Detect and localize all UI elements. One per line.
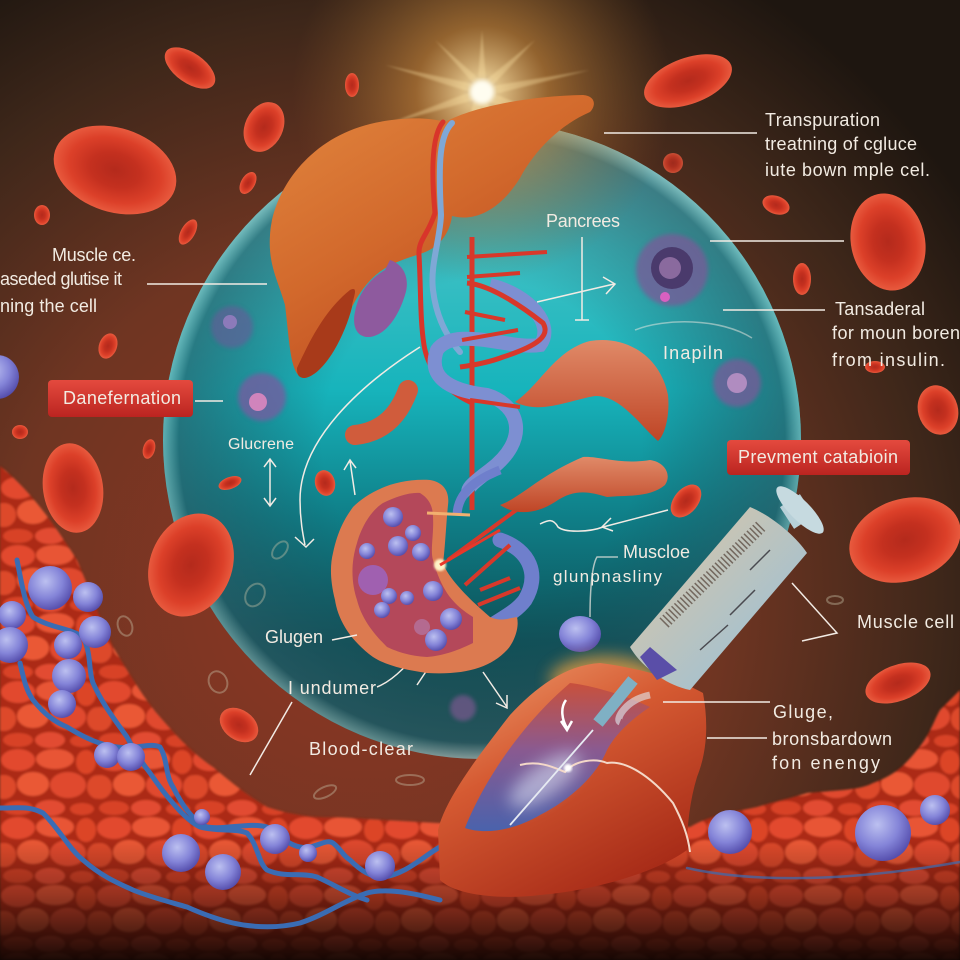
label: muscle cell left: aseded glutise it: [0, 269, 122, 289]
label: glucose breakdown: [772, 702, 892, 773]
label: undumer: I undumer: [288, 678, 376, 698]
label: pancreas: Pancrees: [546, 211, 620, 231]
purple cells: [211, 234, 761, 721]
label: top right: [765, 110, 930, 180]
label: right middle: [832, 299, 960, 370]
sunburst: [292, 0, 672, 282]
label: top right: iute bown mple cel.: [765, 160, 930, 180]
leader lines: [147, 133, 844, 775]
syringe: [510, 480, 830, 825]
red tissue floor: [0, 466, 960, 960]
blue spheres: [0, 355, 950, 890]
label: right middle: from insulin.: [832, 350, 945, 370]
label: right middle: for moun boren: [832, 323, 960, 343]
label: inapiln: Inapiln: [663, 343, 723, 363]
label: glucose breakdown: bronsbardown: [772, 729, 892, 749]
label: blood-clear: Blood-clear: [309, 739, 413, 759]
arrows: [264, 237, 668, 708]
button: prevent catabolism: Prevment catabioin: [738, 447, 898, 467]
stomach cross-section: [331, 480, 518, 673]
label: top right: treatning of cgluce: [765, 134, 917, 154]
label: muscle cell left: [0, 245, 136, 316]
label: muscloe: Muscloe: [623, 542, 690, 562]
label: glucrene: Glucrene: [228, 436, 294, 453]
label: glugen: Glugen: [265, 627, 323, 647]
muscle block: [438, 656, 706, 897]
red blood cells: [12, 39, 960, 749]
button: danefernation: [48, 380, 193, 417]
blood vessels from liver: [419, 122, 470, 402]
glowing sphere: [163, 121, 801, 759]
label: muscle cell left: ning the cell: [0, 296, 97, 316]
blue veins: [0, 560, 960, 927]
label: glucose breakdown: fon enengy: [772, 753, 880, 773]
label: muscle cell left: Muscle ce.: [52, 245, 136, 265]
decorative microbe rings: [115, 538, 843, 802]
button: prevent catabolism: [727, 440, 910, 475]
DNA helix: [435, 237, 547, 643]
label: top right: Transpuration: [765, 110, 880, 130]
pancreas strands: [355, 340, 668, 512]
liver: [270, 95, 594, 378]
label: muscloe: glunpnasliny: [553, 567, 662, 586]
label: right middle: Tansaderal: [835, 299, 925, 319]
label: muscle cell right: Muscle cell: [857, 612, 954, 632]
label: glucose breakdown: Gluge,: [773, 702, 833, 722]
label: muscloe: [553, 542, 690, 586]
button: danefernation: Danefernation: [63, 388, 181, 408]
